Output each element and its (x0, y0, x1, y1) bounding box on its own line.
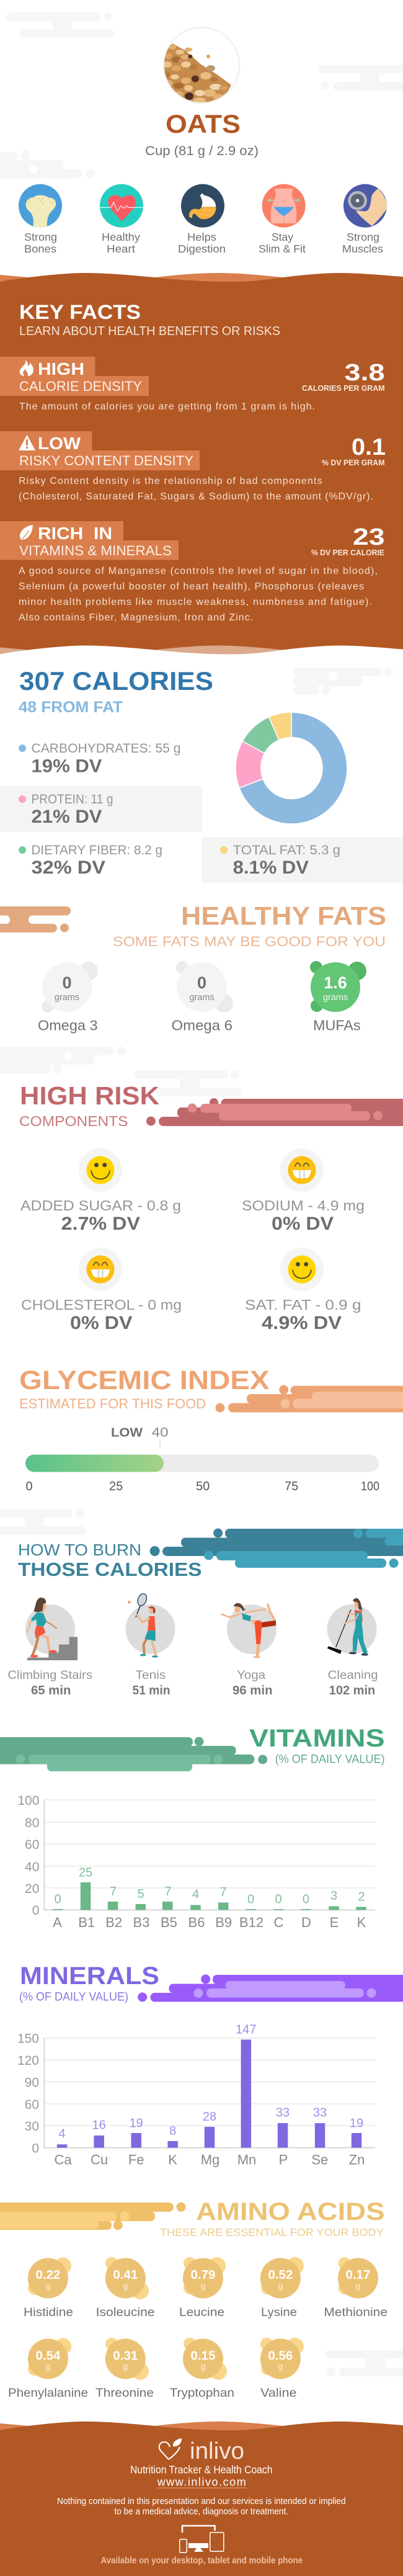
risk: saturated fat: 4.9% DV (262, 1313, 342, 1333)
disclaimer: to be a medical advice, diagnosis or treatment. (114, 2507, 288, 2517)
bar chart: vitamins: K (357, 1915, 366, 1930)
subheading: calories from fat: 48 FROM FAT (19, 699, 123, 716)
activity: yoga: Yoga (237, 1669, 265, 1682)
bar chart: vitamins: 7 (110, 1885, 117, 1898)
legend: dietary fiber: DIETARY FIBER: 8.2 g (31, 843, 162, 857)
benefit: stay slim and fit: Stay (272, 231, 293, 243)
disclaimer (57, 2496, 346, 2517)
activity: cleaning: 102 min (329, 1684, 375, 1697)
subheading: vitamins: (% OF DAILY VALUE) (275, 1753, 385, 1766)
bar chart: minerals: Mn (237, 2152, 256, 2167)
bar chart: minerals: 33 (313, 2106, 327, 2120)
amino: phenylalanine: Phenylalanine (8, 2386, 88, 2400)
subheading: glycemic index: ESTIMATED FOR THIS FOOD (19, 1396, 206, 1411)
legend: total fat: 8.1% DV (233, 857, 309, 878)
benefit: healthy heart: Healthy (102, 231, 140, 243)
activity: cleaning: Cleaning (328, 1669, 378, 1682)
amino: threonine: 0.31 (113, 2348, 138, 2363)
website link: www.inlivo.com (157, 2476, 246, 2489)
legend: total fat: TOTAL FAT: 5.3 g (233, 843, 340, 857)
fact: low risky content density: RISKY CONTENT DENSITY (19, 453, 193, 468)
fat: omega 3: Omega 3 (38, 1017, 98, 1034)
bar chart: vitamins: 0 (303, 1893, 309, 1907)
glycemic gauge: 75 (285, 1480, 298, 1493)
subheading: minerals: (% OF DAILY VALUE) (19, 1991, 128, 2004)
bar chart: vitamins: 80 (25, 1816, 39, 1830)
amino: leucine: g (201, 2281, 205, 2291)
amino: isoleucine: Isoleucine (96, 2305, 155, 2319)
bar chart: minerals: 147 (236, 2023, 256, 2036)
amino: lysine: Lysine (261, 2305, 297, 2319)
bar chart: minerals: 120 (17, 2054, 39, 2068)
risk: saturated fat (245, 1248, 361, 1333)
bar chart: vitamins: 7 (219, 1885, 227, 1899)
amino: histidine: 0.22 (36, 2268, 60, 2282)
amino: tryptophan: 0.15 (191, 2348, 215, 2363)
ribbon: minerals (138, 1974, 403, 2001)
risk: cholesterol: CHOLESTEROL - 0 mg (21, 1297, 182, 1313)
bar chart: minerals: Se (311, 2152, 328, 2167)
legend: carbohydrates: 19% DV (31, 756, 102, 777)
fact: low risky content density (0, 431, 386, 502)
legend: carbohydrates: CARBOHYDRATES: 55 g (31, 741, 181, 756)
activity: yoga: 96 min (232, 1684, 273, 1697)
bar chart: minerals: 150 (17, 2032, 39, 2046)
fat: omega 3: 0 (62, 973, 72, 992)
amino: threonine: g (123, 2361, 128, 2371)
fact: rich in vitamins and minerals (0, 521, 384, 623)
glycemic gauge: 25 (109, 1480, 123, 1493)
risk: added sugar: ADDED SUGAR - 0.8 g (20, 1197, 181, 1214)
amino: phenylalanine: g (46, 2361, 50, 2371)
ribbon: burn calories (150, 1529, 403, 1568)
amino: leucine: Leucine (179, 2305, 224, 2319)
disclaimer: Nothing contained in this presentation and our services is intended or implied (57, 2496, 346, 2507)
benefit: stay slim and fit (259, 184, 306, 255)
benefit: healthy heart: Heart (107, 243, 135, 255)
benefit: strong bones: Bones (24, 243, 56, 255)
fat: omega 6: grams (189, 993, 215, 1003)
subheading: LEARN ABOUT HEALTH BENEFITS OR RISKS (19, 324, 280, 338)
amino: isoleucine: g (123, 2281, 128, 2291)
glycemic gauge (25, 1426, 379, 1493)
heading: those calories: THOSE CALORIES (18, 1559, 202, 1580)
benefit: healthy heart (100, 184, 143, 255)
fat: MUFAs: 1.6 (324, 973, 347, 992)
bar chart: vitamins: B5 (161, 1915, 177, 1930)
fact: rich in vitamins and minerals: % DV PER CALORIE (311, 548, 384, 557)
fat: MUFAs: grams (323, 993, 348, 1003)
panel: key facts (0, 273, 403, 658)
amino: phenylalanine (8, 2338, 88, 2400)
fact: low risky content density: LOW (38, 434, 81, 453)
benefit: stay slim and fit: Slim & Fit (259, 243, 306, 255)
legend: dietary fiber (19, 843, 162, 878)
bar chart: vitamins (17, 1794, 375, 1930)
amino: methionine: g (356, 2281, 360, 2291)
activity: cleaning (327, 1598, 378, 1697)
fat: MUFAs (310, 961, 366, 1034)
bar chart: vitamins: 0 (54, 1893, 61, 1907)
activity: climbing stairs (7, 1598, 92, 1697)
amino: methionine: 0.17 (346, 2268, 370, 2282)
fat: omega 3: grams (55, 993, 79, 1003)
fact: high calorie density: The amount of calories you are getting from 1 gram is high. (19, 401, 315, 412)
bar chart: minerals: Mg (201, 2152, 219, 2167)
heading: how to burn: HOW TO BURN (18, 1541, 141, 1559)
bar chart: minerals: 19 (350, 2116, 363, 2130)
ribbon: high risk (146, 1098, 403, 1126)
risk: added sugar: 2.7% DV (61, 1214, 140, 1234)
amino: histidine: g (46, 2281, 50, 2291)
donut chart: macronutrients (236, 712, 347, 824)
subheading: components: COMPONENTS (19, 1113, 128, 1129)
activity: yoga (221, 1603, 277, 1697)
bar chart: vitamins: D (301, 1915, 311, 1930)
bar chart: vitamins: 0 (247, 1893, 254, 1907)
fact: rich in vitamins and minerals: minor health problems like muscle weakness, numbness and fatigue). (19, 597, 372, 607)
bar chart: minerals: Zn (349, 2152, 365, 2167)
activity: tennis (126, 1593, 175, 1697)
activity: tennis: Tenis (135, 1669, 166, 1682)
heading: glycemic index: GLYCEMIC INDEX (19, 1366, 270, 1395)
amino: threonine (95, 2338, 154, 2400)
glycemic gauge: 100 (361, 1480, 379, 1493)
food photo: oats granola (162, 27, 239, 104)
fact: high calorie density (0, 357, 384, 412)
fact: high calorie density: HIGH (38, 359, 84, 378)
bar chart: vitamins: B9 (215, 1915, 232, 1930)
fact: low risky content density: % DV PER GRAM (322, 458, 384, 467)
amino: valine: g (278, 2361, 283, 2371)
amino: lysine (260, 2257, 304, 2319)
fact: low risky content density: Risky Content density is the relationship of bad components (19, 476, 322, 486)
bar chart: vitamins: 0 (32, 1903, 39, 1918)
bar chart: vitamins: B12 (239, 1915, 264, 1930)
ribbon: amino acids (0, 2203, 186, 2230)
panel: footer (0, 2422, 403, 2576)
risk: cholesterol: 0% DV (70, 1313, 133, 1333)
amino: valine (260, 2338, 304, 2400)
ribbon: healthy fats (0, 906, 71, 932)
benefit: strong muscles (342, 184, 388, 255)
bar chart: minerals: 28 (203, 2110, 216, 2124)
legend: protein: PROTEIN: 11 g (31, 792, 113, 807)
heading: amino acids: AMINO ACIDS (196, 2198, 385, 2225)
subheading: amino acids: THESE ARE ESSENTIAL FOR YOUR BODY (160, 2226, 384, 2238)
benefit: strong bones (19, 184, 62, 255)
benefit: strong muscles: Strong (347, 231, 379, 243)
fact: high calorie density: CALORIE DENSITY (19, 378, 142, 394)
tagline: Nutrition Tracker & Health Coach (130, 2464, 273, 2476)
bar chart: vitamins: 3 (330, 1889, 337, 1903)
bar chart: vitamins: 0 (275, 1893, 282, 1907)
risk: sodium: SODIUM - 4.9 mg (242, 1197, 365, 1214)
heading: vitamins: VITAMINS (249, 1725, 385, 1752)
risk: sodium: 0% DV (272, 1214, 334, 1234)
bar chart: vitamins: E (330, 1915, 339, 1930)
bar chart: vitamins: B6 (188, 1915, 205, 1930)
amino: tryptophan: g (201, 2361, 205, 2371)
heading: high risk: HIGH RISK (20, 1081, 159, 1110)
bar chart: minerals: 19 (130, 2116, 143, 2130)
serving size: Cup (81 g / 2.9 oz) (145, 144, 259, 158)
heading: healthy fats: HEALTHY FATS (181, 901, 386, 931)
benefit: helps digestion: Digestion (178, 243, 226, 255)
fact: rich in vitamins and minerals: Selenium (a powerful booster of heart health), Phosphorus (releaves (19, 581, 364, 592)
amino: valine: 0.56 (268, 2348, 293, 2363)
amino: tryptophan (170, 2338, 234, 2400)
bar chart: minerals: 0 (32, 2142, 39, 2156)
bar chart: minerals: Ca (55, 2152, 72, 2167)
glycemic gauge: 40 (152, 1426, 169, 1439)
fact: rich in vitamins and minerals: VITAMINS & MINERALS (19, 543, 172, 558)
fat: omega 6: Omega 6 (171, 1017, 232, 1034)
fat: MUFAs: MUFAs (313, 1017, 361, 1034)
activity: climbing stairs: 65 min (31, 1684, 71, 1697)
amino: tryptophan: Tryptophan (170, 2386, 234, 2400)
bar chart: vitamins: B3 (133, 1915, 149, 1930)
fact: high calorie density: 3.8 (345, 360, 384, 386)
bar chart: minerals: 90 (25, 2076, 39, 2090)
amino: histidine (24, 2257, 73, 2319)
benefit: strong muscles: Muscles (342, 243, 383, 255)
glycemic gauge: 50 (196, 1480, 210, 1493)
icon: devices (180, 2526, 224, 2552)
heading: key facts: KEY FACTS (19, 301, 141, 323)
amino: lysine: g (278, 2281, 283, 2291)
bar chart: vitamins: 7 (164, 1885, 172, 1898)
bar chart: vitamins: 60 (25, 1838, 39, 1852)
glycemic gauge: LOW (111, 1426, 143, 1439)
logo: inlivo (159, 2438, 244, 2464)
amino: leucine (179, 2257, 226, 2319)
fat: omega 6 (171, 961, 233, 1034)
bar chart: minerals: 60 (25, 2098, 39, 2112)
amino: histidine: Histidine (24, 2305, 73, 2319)
fact: low risky content density: 0.1 (352, 434, 386, 460)
bar chart: minerals: 33 (276, 2106, 290, 2120)
bar chart: vitamins: 20 (25, 1882, 39, 1896)
fact: high calorie density: CALORIES PER GRAM (302, 383, 384, 393)
fact: low risky content density: (Cholesterol, Saturated Fat, Sugars & Sodium) to the amount (%DV/gr). (19, 491, 373, 502)
amino: leucine: 0.79 (191, 2268, 215, 2282)
fact: rich in vitamins and minerals: Also contains Fiber, Magnesium, Iron and Zinc. (19, 612, 253, 623)
legend: protein: 21% DV (31, 807, 102, 827)
title: OATS (166, 109, 241, 138)
bar chart: vitamins: 5 (137, 1887, 144, 1901)
bar chart: vitamins: 2 (358, 1890, 365, 1903)
bar chart: minerals: 8 (169, 2124, 176, 2138)
amino: isoleucine: 0.41 (113, 2268, 138, 2282)
benefit: strong bones: Strong (24, 231, 57, 243)
fat: omega 6: 0 (197, 973, 206, 992)
bar chart: vitamins: 4 (192, 1888, 199, 1902)
bar chart: vitamins: C (273, 1915, 283, 1930)
activity: tennis: 51 min (133, 1684, 170, 1697)
amino: lysine: 0.52 (268, 2268, 293, 2282)
bar chart: minerals: 16 (92, 2119, 106, 2132)
glycemic gauge: 0 (26, 1480, 33, 1493)
heading: minerals: MINERALS (20, 1962, 159, 1990)
bar chart: vitamins: 100 (17, 1794, 39, 1808)
amino: phenylalanine: 0.54 (36, 2348, 61, 2363)
bar chart: minerals: P (279, 2152, 288, 2167)
risk: sodium (242, 1148, 365, 1234)
fact: rich in vitamins and minerals: A good source of Manganese (controls the level of sugar in the blood), (19, 566, 378, 576)
legend: total fat (202, 837, 403, 883)
legend: protein (0, 786, 202, 831)
amino: valine: Valine (260, 2386, 296, 2400)
bar chart: vitamins: 25 (79, 1866, 92, 1880)
activity: climbing stairs: Climbing Stairs (7, 1669, 92, 1682)
legend: carbohydrates (19, 741, 181, 777)
ribbon: vitamins (0, 1737, 267, 1771)
subheading: healthy fats: SOME FATS MAY BE GOOD FOR YOU (113, 934, 386, 949)
benefit: helps digestion: Helps (187, 231, 216, 243)
benefit: helps digestion (178, 184, 226, 255)
bar chart: minerals: K (168, 2152, 177, 2167)
risk: added sugar (20, 1148, 181, 1234)
risk: cholesterol (21, 1248, 182, 1333)
availability note: Available on your desktop, tablet and mobile phone (100, 2556, 303, 2566)
amino: methionine: Methionine (324, 2305, 388, 2319)
bar chart: vitamins: B1 (78, 1915, 95, 1930)
amino: threonine: Threonine (95, 2386, 154, 2400)
ribbon: glycemic index (216, 1385, 403, 1412)
fact: rich in vitamins and minerals: RICH IN (38, 524, 112, 543)
bar chart: minerals: 30 (25, 2119, 39, 2134)
risk: saturated fat: SAT. FAT - 0.9 g (245, 1297, 361, 1313)
amino: isoleucine (96, 2257, 155, 2319)
bar chart: minerals (17, 2023, 375, 2167)
fact: rich in vitamins and minerals: 23 (353, 524, 384, 550)
bar chart: vitamins: A (53, 1915, 62, 1930)
bar chart: minerals: Fe (128, 2152, 144, 2167)
bar chart: vitamins: B2 (105, 1915, 122, 1930)
fat: omega 3 (38, 962, 98, 1034)
logo: inlivo: inlivo (190, 2438, 244, 2464)
amino: methionine (324, 2257, 388, 2319)
legend: dietary fiber: 32% DV (31, 857, 105, 878)
bar chart: minerals: 4 (58, 2127, 66, 2141)
heading: calories: 307 CALORIES (19, 666, 213, 695)
bar chart: vitamins: 40 (25, 1860, 39, 1874)
bar chart: minerals: Cu (91, 2152, 108, 2167)
